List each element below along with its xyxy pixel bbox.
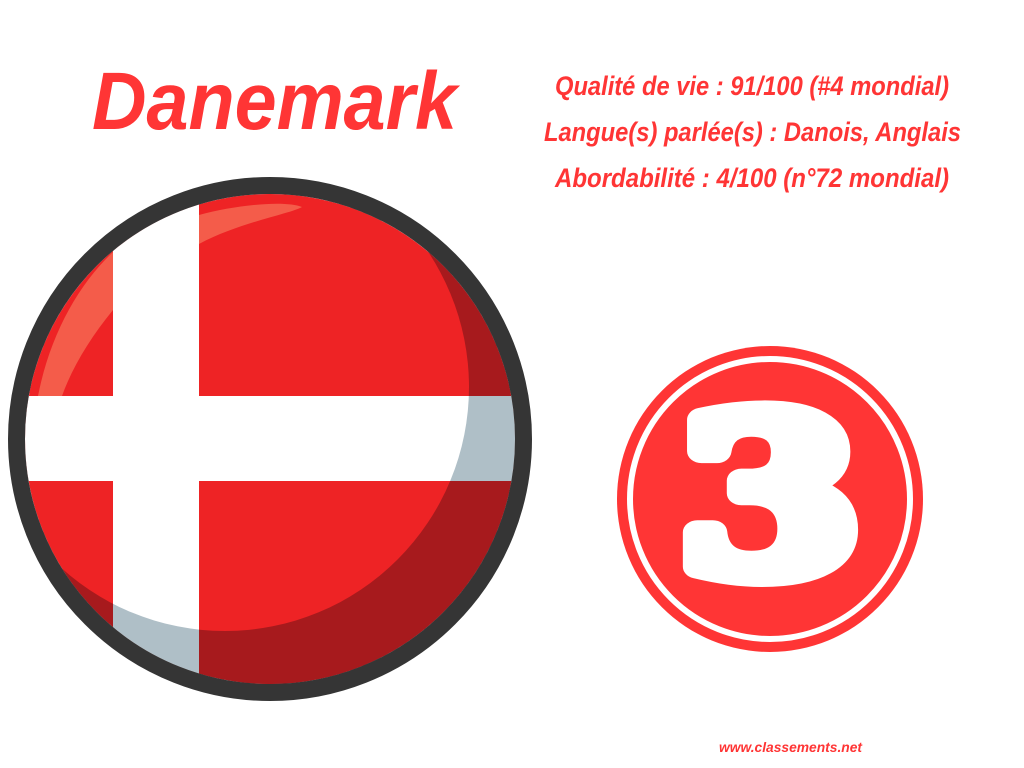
badge: rank 3 bbox=[617, 346, 923, 652]
quality of life line: Qualité de vie : 91/100 (#4 mondial) bbox=[555, 71, 949, 101]
highlight bbox=[38, 204, 302, 396]
icon: Danish flag button bbox=[16, 186, 524, 692]
dark outer ring bbox=[16, 186, 524, 692]
text block: country facts bbox=[544, 71, 961, 193]
footer url: www.classements.net bbox=[719, 739, 863, 755]
flag surface bbox=[20, 190, 520, 690]
affordability line: Abordabilité : 4/100 (n°72 mondial) bbox=[554, 163, 949, 193]
badge inner ring bbox=[630, 359, 910, 639]
badge disc bbox=[617, 346, 923, 652]
title: Danemark bbox=[92, 56, 461, 147]
white cross bbox=[20, 190, 520, 690]
shading bbox=[62, 252, 515, 684]
rank number: 3 bbox=[679, 371, 860, 623]
languages line: Langue(s) parlée(s) : Danois, Anglais bbox=[544, 117, 961, 147]
